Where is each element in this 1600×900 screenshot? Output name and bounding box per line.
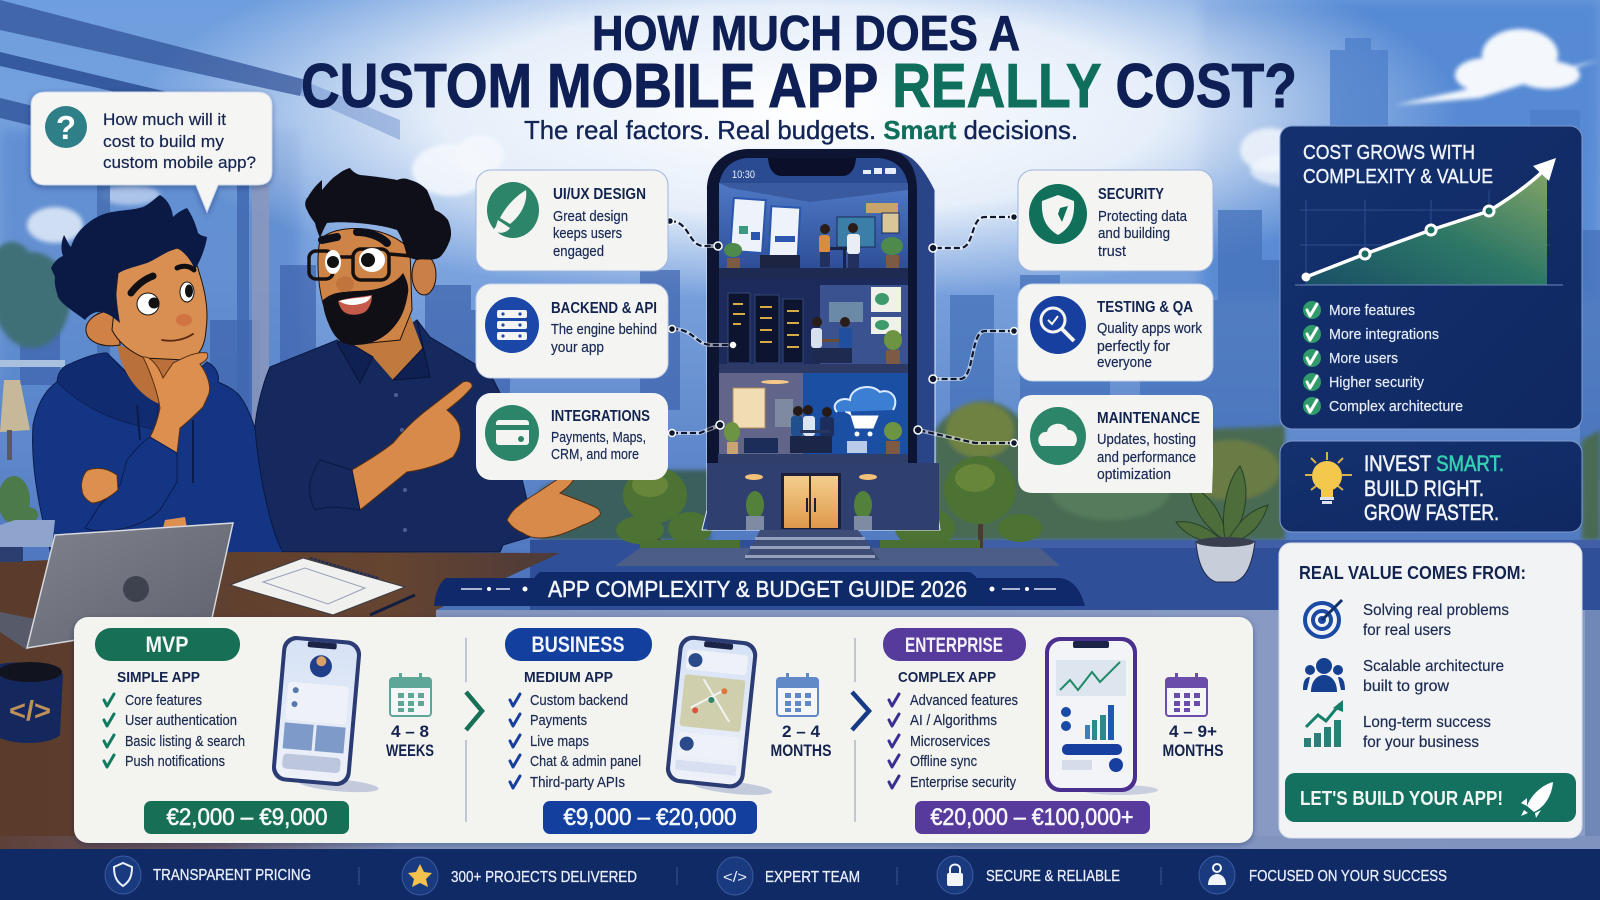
- phone building: [702, 149, 940, 530]
- neck: [117, 345, 175, 405]
- phone mockup: [664, 634, 787, 798]
- duration: 4 – 8: [391, 722, 429, 741]
- banner: budget guide: APP COMPLEXITY & BUDGET GUIDE 2026: [548, 576, 967, 602]
- under panel strip: [0, 836, 1600, 849]
- left character: young developer: [33, 195, 284, 558]
- checklist: Higher security: [1329, 374, 1424, 391]
- card: security: [1018, 170, 1213, 271]
- feature list: [889, 692, 1018, 791]
- slogan: BUILD RIGHT.: [1364, 476, 1484, 501]
- panel: real value: REAL VALUE COMES FROM:: [1299, 563, 1526, 583]
- mouth: [338, 295, 372, 315]
- expert team: EXPERT TEAM: [765, 869, 860, 886]
- duration: [386, 722, 434, 760]
- secure and reliable: SECURE & RELIABLE: [986, 868, 1120, 885]
- feature list: Offline sync: [910, 753, 977, 770]
- phone mockup: [270, 635, 391, 795]
- panel: cost growth: [1280, 126, 1582, 429]
- arrow: business to enterprise: [852, 638, 869, 822]
- card: backend and API: [476, 284, 668, 378]
- beard: [323, 273, 408, 345]
- feature list: [510, 692, 641, 791]
- ground terrace: [0, 540, 1600, 850]
- price: [144, 801, 349, 834]
- projects delivered: 300+ PROJECTS DELIVERED: [451, 869, 637, 886]
- tier: business: [505, 628, 832, 834]
- tier: enterprise: COMPLEX APP: [898, 669, 996, 686]
- card: UI/UX design: keeps users: [553, 225, 622, 242]
- status bar: [732, 158, 896, 181]
- feature list: Push notifications: [125, 753, 225, 770]
- footer bar: [0, 849, 1600, 900]
- card: maintenance: [1018, 395, 1213, 493]
- feature list: Enterprise security: [910, 774, 1016, 791]
- banner: budget guide: [434, 572, 1085, 606]
- duration: [1162, 722, 1224, 760]
- price: €2,000 – €9,000: [166, 804, 328, 831]
- title: HOW MUCH DOES A: [592, 7, 1020, 61]
- hoodie: [33, 353, 284, 558]
- panel: real value: [1279, 543, 1582, 838]
- transparent pricing: [105, 856, 311, 894]
- notebook: [230, 558, 415, 615]
- lamp: [0, 380, 30, 460]
- card: security: Protecting data: [1098, 208, 1188, 225]
- checklist: More integrations: [1329, 326, 1439, 343]
- projects delivered: [402, 857, 637, 895]
- raised hand and forearm: [143, 353, 210, 453]
- value text 3: Long-term success: [1363, 714, 1491, 731]
- panel heading: COMPLEXITY & VALUE: [1303, 166, 1493, 188]
- collar: [337, 320, 430, 383]
- card: security: SECURITY: [1098, 186, 1164, 203]
- price: €9,000 – €20,000: [564, 804, 736, 831]
- floor 3: [719, 373, 908, 454]
- feature list: Chat & admin panel: [530, 753, 641, 770]
- calendar: [1166, 673, 1207, 716]
- shirt: [255, 320, 530, 552]
- status bar: 10:30: [732, 169, 755, 181]
- feature list: Advanced features: [910, 692, 1018, 709]
- card: security: and building: [1098, 225, 1170, 242]
- question text: [103, 110, 256, 172]
- cloud and cart: [835, 387, 895, 453]
- business badge: BUSINESS: [532, 632, 624, 657]
- expert team: [717, 857, 860, 895]
- card: integrations: INTEGRATIONS: [551, 408, 650, 425]
- eyes: [137, 293, 159, 315]
- feature list: User authentication: [125, 712, 237, 729]
- feature list: Custom backend: [530, 692, 628, 709]
- plant left: [0, 476, 38, 562]
- feature list: Core features: [125, 692, 202, 709]
- feature list: Payments: [530, 712, 587, 729]
- connector dots: [666, 214, 1018, 446]
- pointing arm: [352, 381, 472, 510]
- duration: MONTHS: [1162, 741, 1224, 760]
- card: testing and QA: everyone: [1097, 354, 1152, 371]
- card: maintenance: and performance: [1097, 449, 1196, 466]
- checklist: [1303, 301, 1463, 415]
- enterprise badge: ENTERPRISE: [905, 634, 1003, 657]
- card: testing and QA: [1018, 284, 1213, 381]
- duration: 2 – 4: [782, 722, 821, 741]
- feature list: Microservices: [910, 733, 990, 750]
- duration: WEEKS: [386, 741, 434, 760]
- connectors: [670, 217, 1014, 443]
- enterprise badge: [883, 628, 1026, 661]
- value text 1: Solving real problems: [1363, 602, 1509, 619]
- focused on success: FOCUSED ON YOUR SUCCESS: [1249, 868, 1447, 885]
- panel heading: [1303, 142, 1493, 188]
- tier: MVP: SIMPLE APP: [117, 669, 200, 686]
- card: integrations: CRM, and more: [551, 446, 639, 463]
- duration: MONTHS: [770, 741, 832, 760]
- card: integrations: Payments, Maps,: [551, 429, 646, 446]
- ear: [86, 311, 120, 346]
- question text: cost to build my: [103, 132, 225, 151]
- laptop: [0, 523, 233, 650]
- card: backend and API: The engine behind: [551, 321, 657, 338]
- duration: 4 – 9+: [1169, 722, 1217, 741]
- mug: </>: [9, 695, 51, 726]
- title: [301, 7, 1297, 121]
- checklist: More users: [1329, 350, 1398, 367]
- value text 1: [1363, 602, 1509, 639]
- question text: How much will it: [103, 110, 226, 129]
- value text 3: for your business: [1363, 734, 1479, 751]
- right character: consultant: [255, 168, 600, 552]
- face: [318, 229, 412, 345]
- icon: people: [1303, 658, 1345, 692]
- feature list: Third-party APIs: [530, 774, 625, 791]
- card: testing and QA: Quality apps work: [1097, 320, 1202, 337]
- price: €20,000 – €100,000+: [930, 804, 1134, 831]
- transparent pricing: TRANSPARENT PRICING: [153, 867, 311, 884]
- call to action: [1285, 773, 1576, 822]
- business badge: [505, 628, 652, 661]
- value text 2: built to grow: [1363, 678, 1449, 695]
- value text 1: for real users: [1363, 622, 1451, 639]
- card: UI/UX design: UI/UX DESIGN: [553, 186, 646, 203]
- icon: target: [1305, 600, 1342, 637]
- neck: [345, 315, 423, 380]
- card: testing and QA: TESTING & QA: [1097, 299, 1193, 316]
- card: security: trust: [1098, 243, 1127, 260]
- tier: business: MEDIUM APP: [524, 669, 613, 686]
- value text 2: [1363, 658, 1504, 695]
- MVP badge: MVP: [146, 632, 188, 657]
- card: UI/UX design: engaged: [553, 243, 604, 260]
- calendar: [390, 673, 431, 716]
- sleeve: [85, 437, 177, 531]
- growth chart: [1295, 158, 1563, 285]
- card: maintenance: Updates, hosting: [1097, 431, 1196, 448]
- distant tree belt: [540, 401, 1600, 540]
- card: maintenance: optimization: [1097, 466, 1171, 483]
- secure and reliable: [937, 856, 1120, 894]
- card: integrations: [476, 393, 668, 480]
- question icon: [45, 106, 87, 148]
- slogan: GROW FASTER.: [1364, 500, 1499, 525]
- ear: [412, 255, 436, 295]
- slogan: [1364, 451, 1504, 525]
- tier: enterprise: [883, 628, 1224, 834]
- subtitle: The real factors. Real budgets. Smart decisions.: [524, 115, 1078, 145]
- duration: [770, 722, 832, 760]
- call to action: LET'S BUILD YOUR APP!: [1300, 788, 1503, 810]
- checklist: More features: [1329, 302, 1415, 319]
- face: [112, 248, 207, 360]
- feature list: AI / Algorithms: [910, 712, 997, 729]
- card: backend and API: BACKEND & API: [551, 300, 657, 317]
- arrow: MVP to business: [466, 638, 482, 822]
- glasses: [309, 249, 412, 280]
- value text 3: [1363, 714, 1491, 751]
- feature list: Basic listing & search: [125, 733, 245, 750]
- expert team: </>: [723, 869, 747, 886]
- calendar: [777, 673, 818, 716]
- feature list: Live maps: [530, 733, 589, 750]
- card: maintenance: MAINTENANCE: [1097, 410, 1200, 427]
- crossed arm hand: [81, 468, 118, 503]
- trees beside building: [616, 456, 1042, 550]
- card: UI/UX design: Great design: [553, 208, 628, 225]
- question icon: ?: [56, 109, 76, 146]
- feature list: [104, 692, 245, 770]
- ground floor: [707, 463, 939, 530]
- mug: [0, 662, 63, 743]
- tier: MVP: [95, 628, 434, 834]
- slogan: INVEST SMART.: [1364, 451, 1504, 476]
- card: backend and API: your app: [551, 339, 604, 356]
- MVP badge: [95, 628, 240, 661]
- table: [0, 552, 560, 850]
- open hand: [507, 473, 600, 538]
- question text: custom mobile app?: [103, 153, 256, 172]
- phone mockup: [1045, 637, 1158, 795]
- card: testing and QA: perfectly for: [1097, 338, 1170, 355]
- hair: [305, 168, 451, 260]
- floor 2: [719, 279, 908, 364]
- card: UI/UX design: [476, 170, 668, 271]
- plant right: [1176, 466, 1268, 582]
- value text 2: Scalable architecture: [1363, 658, 1504, 675]
- hair: [51, 195, 207, 323]
- panel: budget tiers: [74, 617, 1253, 843]
- sill: [0, 520, 55, 547]
- panel: invest smart: [1280, 441, 1582, 532]
- stairs and plaza: [615, 530, 1060, 566]
- checklist: Complex architecture: [1329, 398, 1463, 415]
- title: CUSTOM MOBILE APP REALLY COST?: [301, 52, 1297, 121]
- speech bubble: [31, 92, 272, 212]
- focused on success: [1199, 856, 1447, 894]
- panel heading: COST GROWS WITH: [1303, 142, 1475, 164]
- floor 1: [719, 183, 908, 268]
- icon: light bulb: [1305, 452, 1352, 504]
- icon: growth chart: [1304, 700, 1343, 747]
